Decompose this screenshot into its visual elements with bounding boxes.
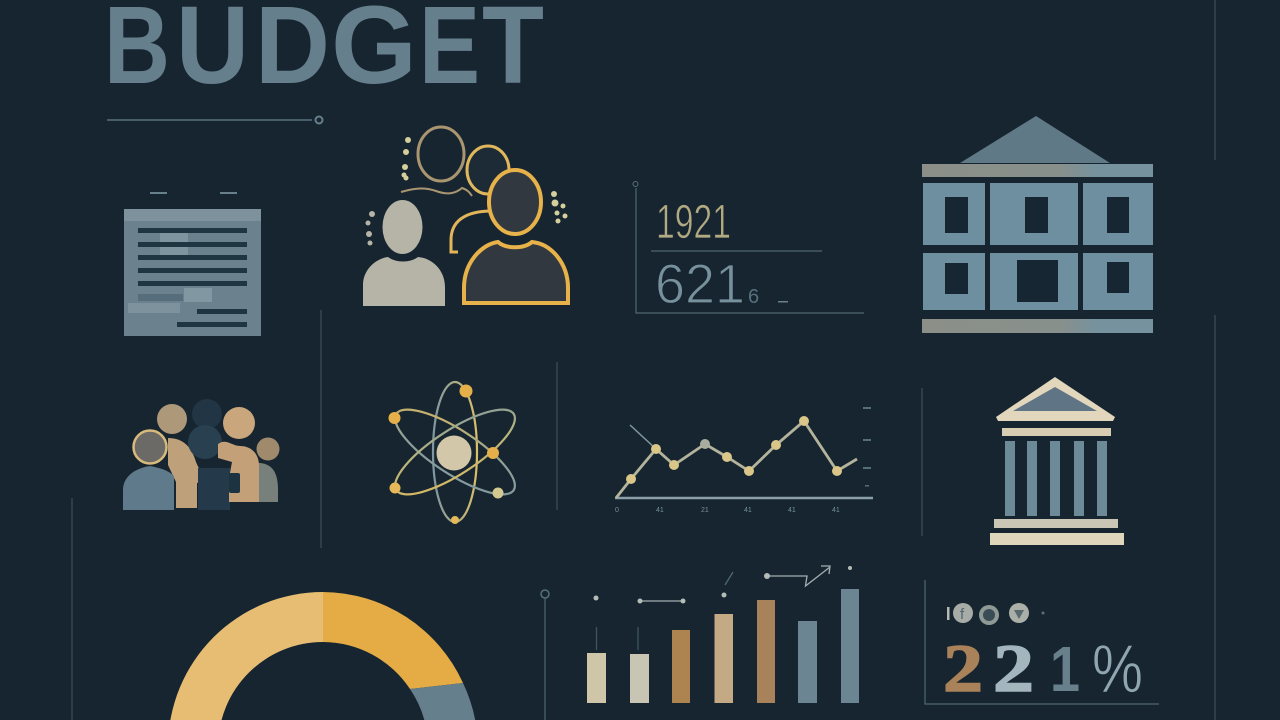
columns xyxy=(1005,441,1107,516)
panel: percentage: % xyxy=(1092,631,1143,707)
icon: large building xyxy=(922,116,1153,333)
specks xyxy=(402,137,568,224)
number 6216: 621 xyxy=(655,252,745,315)
back shoulder xyxy=(451,211,492,252)
panel: number readout: 6 xyxy=(748,286,759,308)
title xyxy=(104,0,544,107)
electrons xyxy=(388,384,504,524)
axis labels: 41 xyxy=(788,507,796,514)
base xyxy=(994,519,1118,528)
icon: crowd xyxy=(123,399,280,510)
axis labels: 0 xyxy=(615,507,619,514)
icon: document xyxy=(124,192,261,336)
annotations xyxy=(596,566,830,650)
axis labels xyxy=(615,507,840,514)
panel: number readout xyxy=(633,182,864,315)
right person xyxy=(223,407,255,439)
gray person xyxy=(363,200,445,306)
axis labels: 41 xyxy=(832,507,840,514)
panel: percentage xyxy=(925,580,1159,707)
nucleus xyxy=(436,436,472,470)
icon: atom xyxy=(384,382,526,524)
back head left xyxy=(418,127,464,181)
line chart xyxy=(615,407,873,514)
panel: percentage: 2 xyxy=(993,630,1034,706)
front person xyxy=(464,170,568,303)
icon: classical bank xyxy=(990,377,1124,545)
social icons: f xyxy=(960,606,965,623)
axis labels: 41 xyxy=(744,507,752,514)
wave xyxy=(401,188,472,196)
value 221%: 2 xyxy=(943,630,983,706)
bars xyxy=(587,653,606,703)
roof xyxy=(960,116,1110,163)
axis labels: 41 xyxy=(656,507,664,514)
social icons xyxy=(947,603,1044,625)
bar chart xyxy=(541,566,859,720)
panel: percentage: 1 xyxy=(1050,633,1080,705)
bottom band xyxy=(922,319,1153,333)
donut chart xyxy=(168,592,478,720)
icon: people outlines xyxy=(363,127,568,306)
pediment xyxy=(996,377,1115,421)
entablature xyxy=(1002,428,1111,436)
back head right xyxy=(467,146,509,194)
front left person xyxy=(134,430,166,464)
title underline xyxy=(107,116,322,124)
far right person xyxy=(256,438,280,460)
number 1921: 1921 xyxy=(656,196,731,249)
top band xyxy=(922,164,1153,177)
axis labels: 21 xyxy=(701,507,709,514)
back left person xyxy=(157,404,187,434)
center dark people xyxy=(192,399,222,429)
